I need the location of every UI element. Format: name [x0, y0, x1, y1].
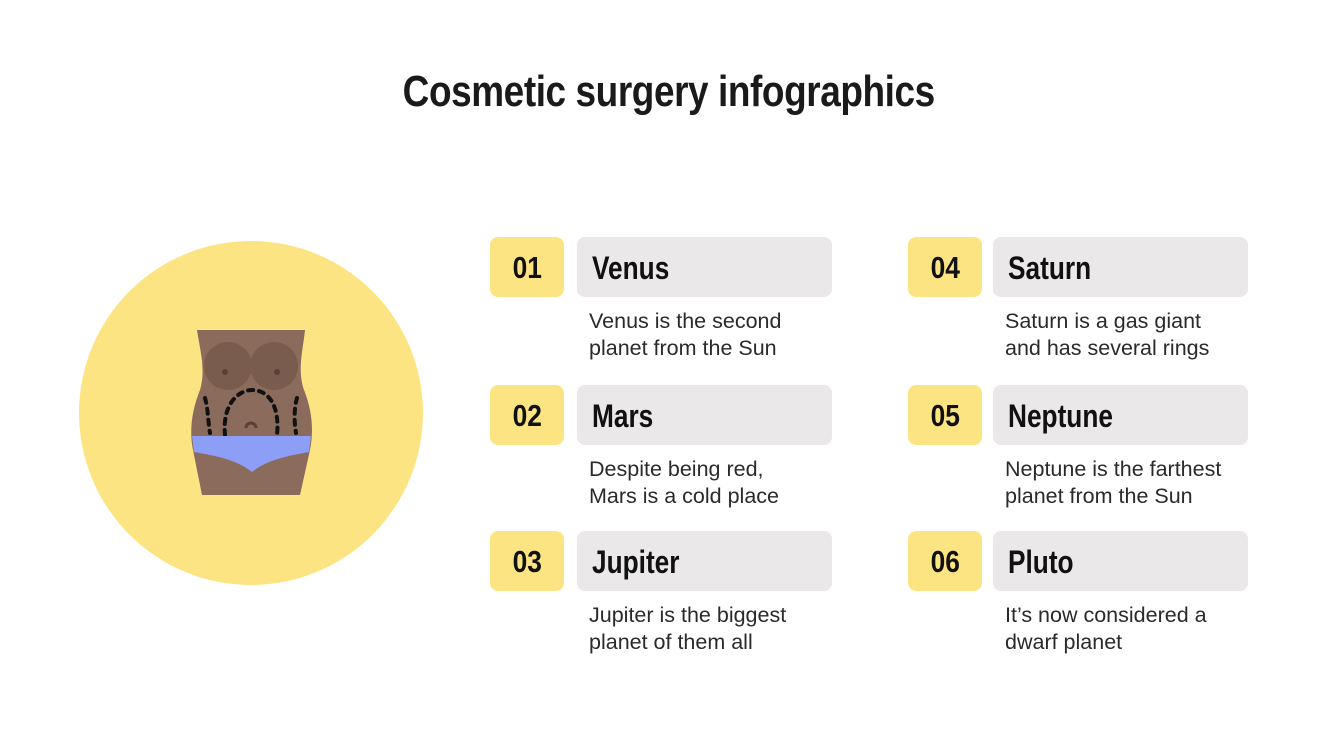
item 05: 05 — [930, 398, 960, 433]
item 03: 03 — [512, 544, 542, 579]
item 02: Despite being red, — [589, 457, 764, 481]
item 04: 04 — [930, 250, 960, 285]
item 01: 01 — [512, 250, 542, 285]
item 05 — [908, 385, 1248, 508]
item 06: It’s now considered a — [1005, 603, 1207, 627]
item 02: Mars is a cold place — [589, 484, 779, 508]
item 01 — [490, 237, 832, 360]
item 06: dwarf planet — [1005, 630, 1122, 654]
item 04 — [908, 237, 1248, 360]
item 03: planet of them all — [589, 630, 753, 654]
item 01: planet from the Sun — [589, 336, 777, 360]
item 01: Venus — [592, 250, 669, 286]
item 06 — [908, 531, 1248, 654]
item 06: 06 — [930, 544, 960, 579]
item 02 — [490, 385, 832, 508]
item 02: Mars — [592, 398, 653, 434]
item 05: Neptune — [1008, 398, 1113, 434]
item 06: Pluto — [1008, 544, 1074, 580]
item 02: 02 — [512, 398, 542, 433]
item 05: Neptune is the farthest — [1005, 457, 1221, 481]
item 03 — [490, 531, 832, 654]
illustration: yellow circle with torso — [79, 241, 423, 585]
item 04: Saturn — [1008, 250, 1091, 286]
item 05: planet from the Sun — [1005, 484, 1193, 508]
item 01: Venus is the second — [589, 309, 781, 333]
item 03: Jupiter is the biggest — [589, 603, 786, 627]
item 04: Saturn is a gas giant — [1005, 309, 1201, 333]
title: Cosmetic surgery infographics — [403, 67, 935, 116]
item 04: and has several rings — [1005, 336, 1209, 360]
item 03: Jupiter — [592, 544, 679, 580]
